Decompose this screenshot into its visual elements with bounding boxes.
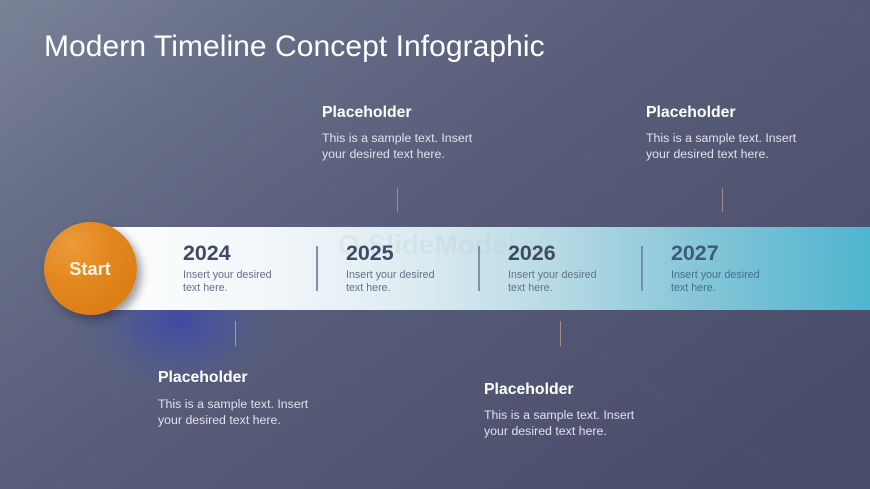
year block: 2026: Insert your desired	[508, 269, 597, 281]
year block: 2024: 2024	[183, 241, 231, 265]
year block: 2027: Insert your desired	[671, 269, 760, 281]
year block: 2026	[508, 241, 597, 294]
year block: 2025: 2025	[346, 241, 394, 265]
callout top 1: Placeholder	[322, 104, 412, 121]
year block: 2025: text here.	[346, 282, 391, 294]
connector	[235, 321, 236, 346]
year block: 2026: 2026	[508, 241, 556, 265]
title: Modern Timeline Concept Infographic	[44, 30, 545, 63]
year block: 2024: Insert your desired	[183, 269, 272, 281]
callout bottom 1: Placeholder	[158, 369, 248, 386]
callout top 1: This is a sample text. Insert	[322, 131, 472, 145]
callout bottom 2	[484, 321, 634, 438]
callout top 2: Placeholder	[646, 104, 736, 121]
connector	[722, 188, 723, 212]
year block: 2025	[346, 241, 435, 294]
start label: Start	[69, 259, 111, 279]
year block: 2024	[183, 241, 272, 294]
callout bottom 2: Placeholder	[484, 381, 574, 398]
year block: 2027	[671, 241, 760, 294]
year block: 2025: Insert your desired	[346, 269, 435, 281]
year block: 2026: text here.	[508, 282, 553, 294]
callout bottom 1: This is a sample text. Insert	[158, 397, 308, 411]
connector	[560, 321, 561, 346]
watermark: O SlideModel	[338, 229, 515, 260]
callout bottom 2: your desired text here.	[484, 424, 607, 438]
divider 1	[316, 246, 318, 291]
connector	[397, 188, 398, 212]
year block: 2027: 2027	[671, 241, 719, 265]
year block: 2027: text here.	[671, 282, 716, 294]
start circle	[44, 222, 137, 315]
callout top 1	[322, 104, 472, 212]
callout top 2: This is a sample text. Insert	[646, 131, 796, 145]
year block: 2024: text here.	[183, 282, 228, 294]
callout top 2	[646, 104, 796, 212]
callout top 1: your desired text here.	[322, 147, 445, 161]
callout bottom 1	[158, 321, 308, 427]
divider 2	[478, 246, 480, 291]
callout top 2: your desired text here.	[646, 147, 769, 161]
callout bottom 1: your desired text here.	[158, 413, 281, 427]
timeline band	[90, 227, 870, 310]
callout bottom 2: This is a sample text. Insert	[484, 408, 634, 422]
divider 3	[640, 246, 642, 291]
